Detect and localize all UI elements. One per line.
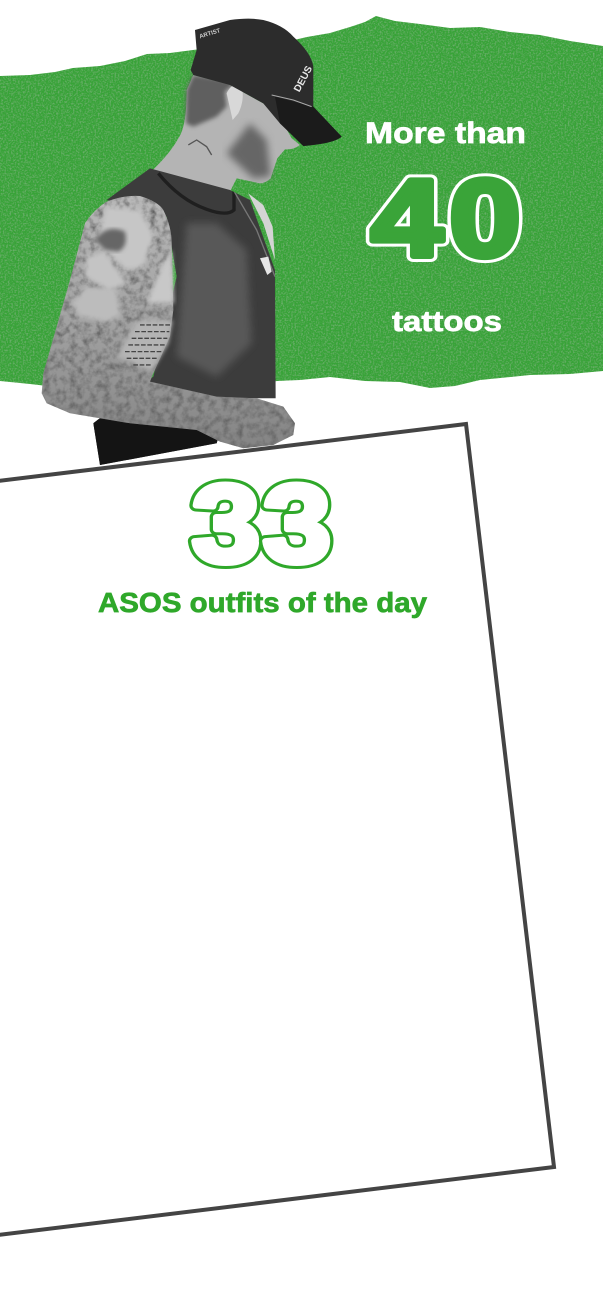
label: more than: More than bbox=[365, 117, 526, 150]
number 33 outline: 3 bbox=[263, 462, 331, 586]
number 40 outline: 0 bbox=[449, 158, 521, 280]
neck and face bbox=[153, 75, 300, 207]
label: tattoos: tattoos bbox=[392, 306, 502, 338]
necklace pendant bbox=[260, 257, 272, 275]
bare bicep bbox=[147, 250, 174, 303]
tattooed arm bbox=[42, 196, 295, 448]
number 33 outline: 3 bbox=[192, 462, 260, 586]
stat: more than 40 tattoos bbox=[365, 117, 526, 338]
cap bbox=[191, 19, 342, 146]
number 40 outline: 4 bbox=[371, 157, 443, 280]
cap lettering: DEUS bbox=[292, 64, 315, 94]
script tattoo on inner arm bbox=[117, 320, 173, 372]
torn green paper background bbox=[0, 16, 603, 395]
number 33 outline: 3 bbox=[263, 462, 331, 586]
neck tattoo bbox=[188, 140, 212, 155]
hair bbox=[186, 75, 237, 127]
number 33 outline bbox=[192, 462, 331, 586]
number 33 outline: 3 bbox=[192, 462, 260, 586]
stat: 33 ASOS outfits bbox=[98, 462, 427, 618]
tilted white panel bbox=[0, 424, 554, 1236]
cap: ARTIST bbox=[199, 28, 222, 40]
number 40 outline: 0 bbox=[449, 158, 521, 280]
number 40 outline bbox=[371, 157, 521, 280]
shoulder sliver bbox=[248, 193, 275, 260]
ear bbox=[227, 85, 243, 120]
label: ASOS outfits of the day: ASOS outfits of the day bbox=[98, 587, 427, 618]
beard bbox=[227, 123, 271, 178]
tank top bbox=[90, 168, 276, 467]
number 40 outline: 4 bbox=[371, 157, 443, 280]
photo: man in cap with tattooed arm bbox=[42, 19, 342, 467]
angel tattoo bbox=[72, 207, 153, 322]
